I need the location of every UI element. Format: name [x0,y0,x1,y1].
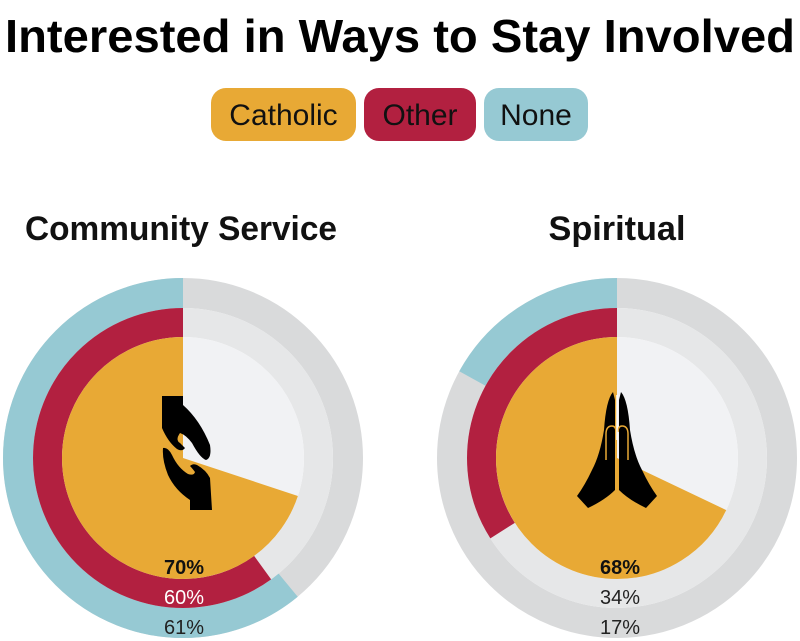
legend: Other [364,88,476,141]
legend: Catholic: Catholic [229,99,338,132]
labels: percentages: 17% [600,617,640,639]
chart: Community Service [18,293,348,639]
legend: Other: Other [382,99,458,132]
labels: percentages [600,557,640,639]
labels: percentages [164,557,204,639]
legend: Catholic [211,88,356,141]
labels: percentages: 68% [600,557,640,579]
heading: Community Service: Community Service [25,210,337,248]
labels: percentages: 34% [600,587,640,609]
labels: percentages: 61% [164,617,204,639]
legend: None: None [500,99,572,132]
legend: None [484,88,588,141]
legend [211,88,588,141]
icon: praying hands [577,392,657,508]
labels: percentages: 70% [164,557,204,579]
icon: hands [162,396,212,510]
heading: Spiritual: Spiritual [548,210,686,248]
title: Interested in Ways to Stay Involved [5,10,795,62]
chart: Spiritual [452,293,782,639]
labels: percentages: 60% [164,587,204,609]
